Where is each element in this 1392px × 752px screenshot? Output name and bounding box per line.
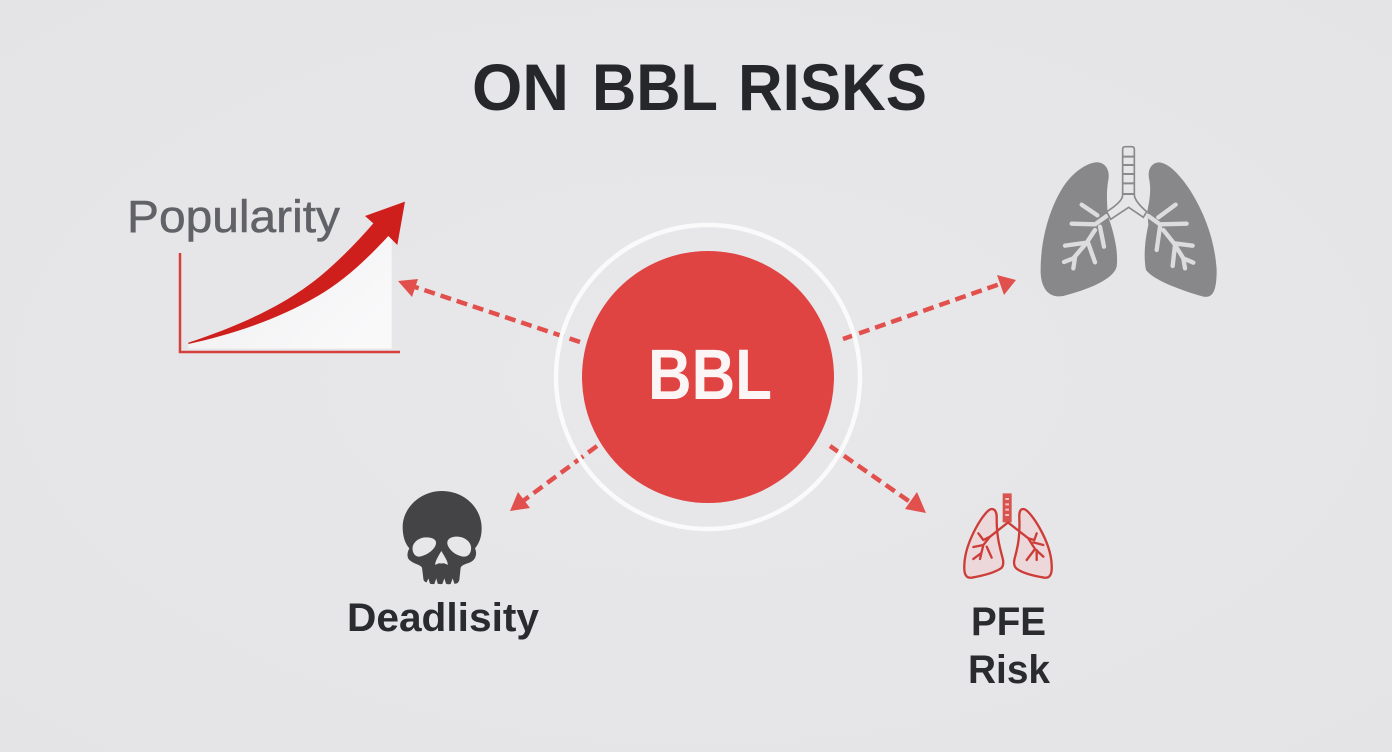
trachea [1107,147,1147,219]
arrow: to popularity [398,279,580,342]
label: PFE Risk: Risk [968,648,1051,692]
icon: grey lungs [1041,147,1217,297]
arrow: to lungs [843,275,1016,339]
arrow: to PFE risk [830,446,926,513]
growth arrow [188,202,405,344]
title: RISKS [738,50,927,124]
red circle [582,251,834,503]
trachea [1003,493,1012,522]
title: ON [472,50,569,124]
BBL label: BBL [648,336,772,415]
chart: popularity growth [127,191,405,352]
icon: red outline lungs [964,493,1052,578]
arrow: to deadliness [510,446,597,511]
central BBL node [556,225,860,529]
icon: skull [403,491,482,584]
title: BBL [592,50,718,124]
bronchi [973,523,1043,560]
label: PFE Risk [968,600,1051,692]
axes [180,253,400,352]
label: PFE Risk: PFE [971,600,1046,644]
title [472,50,927,124]
chart label: Popularity: Popularity [127,191,341,242]
label: Deadlisity: Deadlisity [347,596,540,640]
outer ring [556,225,860,529]
area under curve [188,236,392,349]
